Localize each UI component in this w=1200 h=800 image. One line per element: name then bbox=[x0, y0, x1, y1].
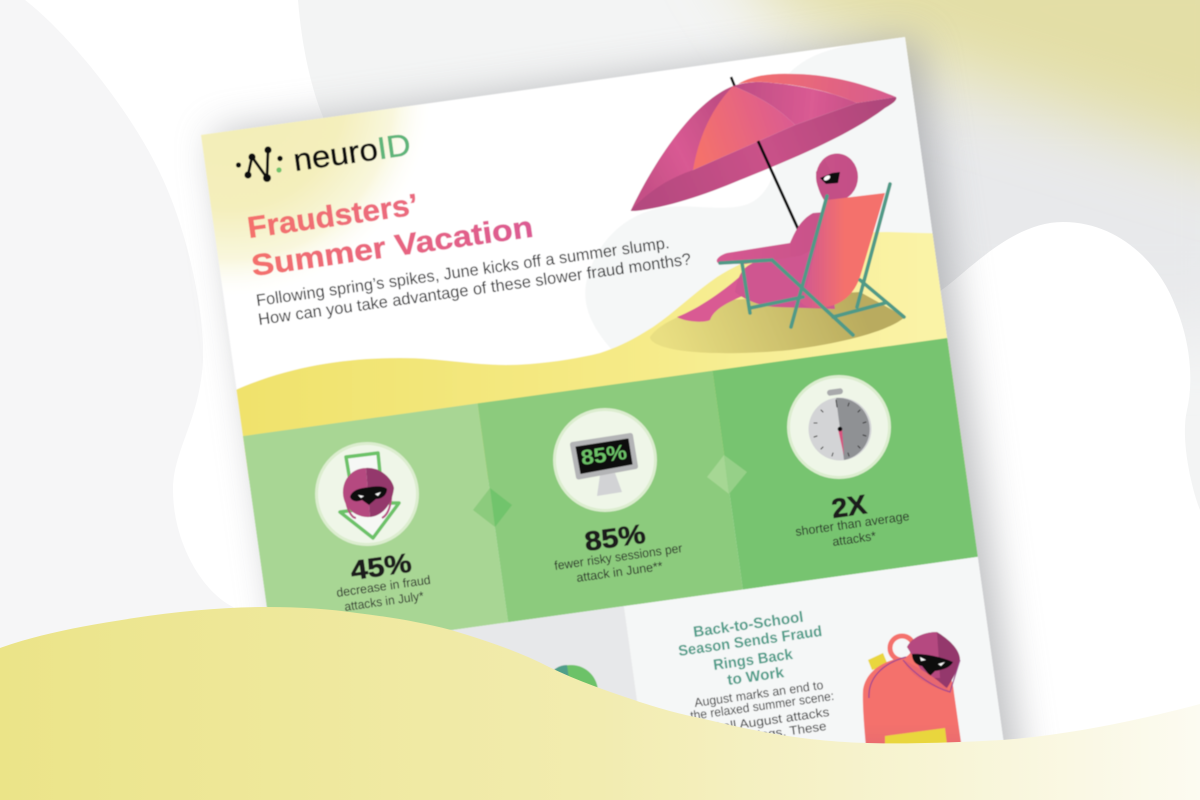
diamond divider 2 bbox=[707, 455, 747, 494]
caption 85% bbox=[553, 541, 683, 585]
icon: stopwatch bbox=[788, 376, 890, 478]
beach illustration bbox=[631, 74, 905, 353]
number 45%: 45% bbox=[349, 548, 413, 586]
caption 2X: attacks* bbox=[831, 529, 877, 549]
title: Summer Vacation bbox=[249, 211, 535, 283]
section heading: back-to-school: to Work bbox=[726, 664, 786, 689]
fraudster figure bbox=[677, 154, 858, 322]
background: white blob right bbox=[880, 222, 1200, 800]
caption 2X: shorter than average bbox=[794, 509, 910, 539]
header yellow glow bbox=[200, 106, 414, 280]
sand wave bbox=[225, 232, 970, 480]
background: grey shade top right bbox=[860, 60, 1200, 330]
hero grey backdrop bbox=[586, 38, 932, 348]
section body text: August marks an end to bbox=[693, 678, 824, 710]
caption 45% bbox=[335, 573, 432, 614]
number 2X: 2X bbox=[830, 489, 868, 524]
stat column 1 background bbox=[243, 403, 508, 655]
infographic card bbox=[200, 36, 1004, 744]
subtitle: How can you take advantage of these slower fraud months? bbox=[257, 250, 692, 329]
icon: backpack with fraudster bbox=[863, 632, 965, 770]
section body text: fraud rings. These bbox=[718, 719, 827, 748]
lower right panel bbox=[625, 558, 1002, 743]
chair canvas bbox=[800, 193, 885, 308]
caption 45%: attacks in July* bbox=[343, 589, 425, 614]
chair frame bbox=[720, 184, 904, 335]
foreground yellow wave bbox=[0, 607, 1200, 800]
background: yellow glow top right bbox=[720, 0, 1200, 175]
diamond divider 1 bbox=[473, 488, 512, 527]
icon: hooded fraudster on down arrow bbox=[316, 444, 418, 544]
umbrella canopy bbox=[631, 74, 896, 211]
umbrella pole top bbox=[731, 77, 735, 87]
title: Fraudsters’ bbox=[245, 188, 420, 245]
stat: 45% decrease bbox=[316, 444, 432, 614]
lower left panel bbox=[452, 606, 638, 701]
section body text bbox=[689, 678, 835, 748]
card shadow bbox=[214, 37, 1022, 780]
icon: monitor showing 85%: 85% bbox=[579, 441, 629, 470]
icon: monitor showing 85% bbox=[554, 410, 656, 510]
caption 85%: fewer risky sessions per bbox=[553, 541, 683, 573]
umbrella pole bbox=[758, 141, 799, 231]
section heading: back-to-school: Rings Back bbox=[712, 646, 794, 674]
figure eye mask bbox=[820, 172, 840, 184]
background: grey blob top right bbox=[298, 0, 1200, 520]
stat column 3 background bbox=[712, 338, 979, 590]
caption 85%: attack in June** bbox=[575, 559, 664, 585]
chart: pie in lower left panel bbox=[544, 665, 598, 719]
section heading: back-to-school bbox=[677, 609, 823, 689]
number 85%: 85% bbox=[583, 519, 647, 557]
title bbox=[245, 188, 535, 283]
stat column 2 background bbox=[478, 371, 743, 622]
chair ground shadow bbox=[650, 292, 905, 353]
stat: 2X shorter bbox=[788, 376, 910, 549]
section heading: back-to-school: Back-to-School bbox=[692, 609, 804, 641]
section body text: of all August attacks bbox=[706, 705, 830, 736]
logo wordmark: neuroID bbox=[291, 127, 413, 178]
section body text: the relaxed summer scene: bbox=[689, 689, 835, 723]
background: light grey blob left bbox=[0, 0, 260, 700]
neuroID logo bbox=[236, 127, 413, 182]
stat: 85% fewer bbox=[553, 410, 683, 585]
caption 45%: decrease in fraud bbox=[335, 573, 432, 600]
subtitle: Following spring’s spikes, June kicks off a summer slump. bbox=[255, 234, 670, 310]
logo network icon bbox=[236, 146, 283, 182]
section heading: back-to-school: Season Sends Fraud bbox=[677, 623, 823, 660]
